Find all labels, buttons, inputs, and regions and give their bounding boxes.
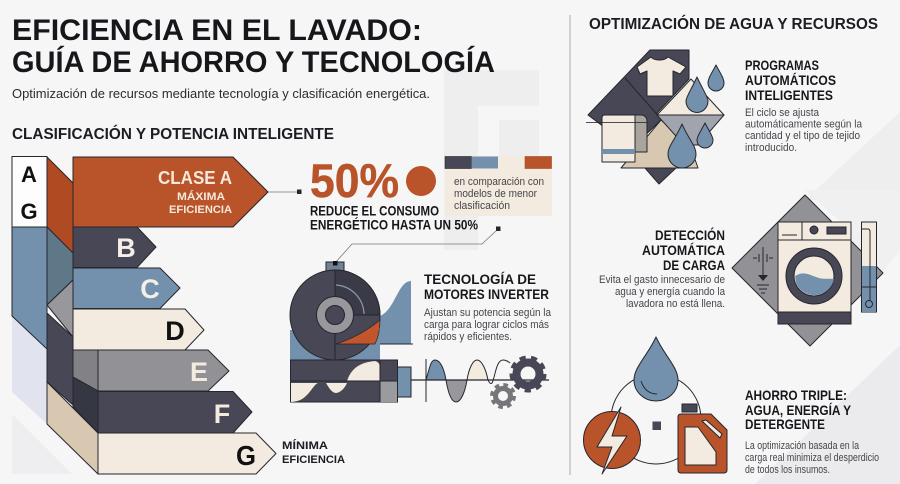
text: ahorro triple xyxy=(745,387,879,476)
drops xyxy=(708,65,724,91)
text: ahorro triple: de todos los insumos. xyxy=(745,464,830,476)
bar A: CLASE A xyxy=(158,168,232,188)
text: programas automáticos: AUTOMÁTICOS xyxy=(745,72,836,88)
text: detección automática: lavadora no está llena. xyxy=(626,298,725,310)
energy class chart xyxy=(12,156,276,474)
title: GUÍA DE AHORRO Y TECNOLOGÍA xyxy=(12,45,495,79)
text: motores inverter: Ajustan su potencia según la xyxy=(424,307,552,319)
bar C: C xyxy=(140,274,160,304)
chart: sine wave xyxy=(411,359,549,402)
bar D xyxy=(73,309,204,350)
text: detección automática: AUTOMÁTICA xyxy=(642,242,725,258)
drop xyxy=(634,337,678,401)
text: ahorro triple: AHORRO TRIPLE: xyxy=(745,387,847,403)
text: motores inverter: TECNOLOGÍA DE xyxy=(424,271,536,287)
bolt xyxy=(584,412,640,468)
text: motores inverter: carga para lograr ciclos más xyxy=(424,319,549,331)
callout: comparison: modelos de menor xyxy=(454,188,537,200)
text: programas automáticos: cantidad y el tipo de tejido xyxy=(745,130,860,142)
drive base xyxy=(290,360,398,402)
bar G xyxy=(98,433,276,474)
icon: large gear xyxy=(512,358,544,390)
heading: clasificación: CLASIFICACIÓN Y POTENCIA INTELIGENTE xyxy=(12,124,334,143)
label: mínima eficiencia xyxy=(282,439,345,466)
text: detección automática: DETECCIÓN xyxy=(655,226,725,243)
callout: comparison: en comparación con xyxy=(454,176,544,188)
text: detección automática xyxy=(599,226,726,310)
callout: comparison xyxy=(445,156,552,216)
text: ahorro triple: DETERGENTE xyxy=(745,416,825,432)
connector: class A to 50% xyxy=(268,190,302,194)
title: EFICIENCIA EN EL LAVADO: xyxy=(12,14,422,47)
stat: 50%: 50% xyxy=(310,154,399,207)
bar E xyxy=(98,350,229,391)
detergent jug xyxy=(682,404,697,412)
bar G: G xyxy=(236,440,256,471)
orange wedge xyxy=(336,320,380,344)
text: programas automáticos: automáticamente según la xyxy=(745,118,863,130)
text: ahorro triple: La optimización basada en la xyxy=(745,440,860,452)
bar D: D xyxy=(165,316,185,346)
t-shirt xyxy=(637,57,686,96)
icon: clothes and drops xyxy=(586,50,724,184)
text: programas automáticos: El ciclo se ajusta xyxy=(745,107,820,119)
icon: water, energy, detergent xyxy=(584,337,727,474)
bar E: E xyxy=(190,357,208,387)
subtitle: Optimización de recursos mediante tecnología y clasificación energética. xyxy=(12,86,430,101)
bar F: F xyxy=(214,399,230,429)
bar C xyxy=(73,268,180,308)
text: ahorro triple: AGUA, ENERGÍA Y xyxy=(745,402,852,418)
energy class chart: G xyxy=(20,199,38,224)
bar B: B xyxy=(116,233,136,263)
connector: stat to motor xyxy=(335,226,500,263)
text: programas automáticos: introducido. xyxy=(745,142,797,154)
text: motores inverter: MOTORES INVERTER xyxy=(424,286,549,302)
icon: washing machine xyxy=(732,195,883,346)
text: detección automática: agua y energía cuando la xyxy=(615,286,726,298)
side letters: A xyxy=(21,162,37,187)
stat description: ENERGÉTICO HASTA UN 50% xyxy=(310,218,478,232)
bar B xyxy=(73,227,156,268)
text: programas automáticos xyxy=(745,57,863,154)
bar A: EFICIENCIA xyxy=(169,204,232,216)
water tube xyxy=(862,222,876,312)
text: motores inverter xyxy=(424,271,552,343)
bar A: MÁXIMA xyxy=(177,190,225,203)
bar A xyxy=(73,157,268,227)
icon: small gear xyxy=(492,385,514,407)
bar F xyxy=(98,392,252,433)
callout: comparison: clasificación xyxy=(454,200,510,212)
text: detección automática: DE CARGA xyxy=(663,257,725,273)
text: programas automáticos: INTELIGENTES xyxy=(745,87,833,103)
level arrow xyxy=(753,247,773,293)
label: mínima eficiencia: MÍNIMA xyxy=(282,439,328,452)
text: motores inverter: rápidos y eficientes. xyxy=(424,331,512,343)
text: programas automáticos: PROGRAMAS xyxy=(745,57,819,73)
icon: inverter motor xyxy=(290,261,413,402)
title xyxy=(12,14,495,79)
label: mínima eficiencia: EFICIENCIA xyxy=(282,454,345,466)
stat description xyxy=(310,204,478,232)
side column A-G xyxy=(12,156,98,474)
towel xyxy=(586,115,647,162)
text: detección automática: Evita el gasto innecesario de xyxy=(599,274,725,286)
heading: optimización: OPTIMIZACIÓN DE AGUA Y RECURSOS xyxy=(589,14,878,33)
stat description: REDUCE EL CONSUMO xyxy=(310,204,439,218)
